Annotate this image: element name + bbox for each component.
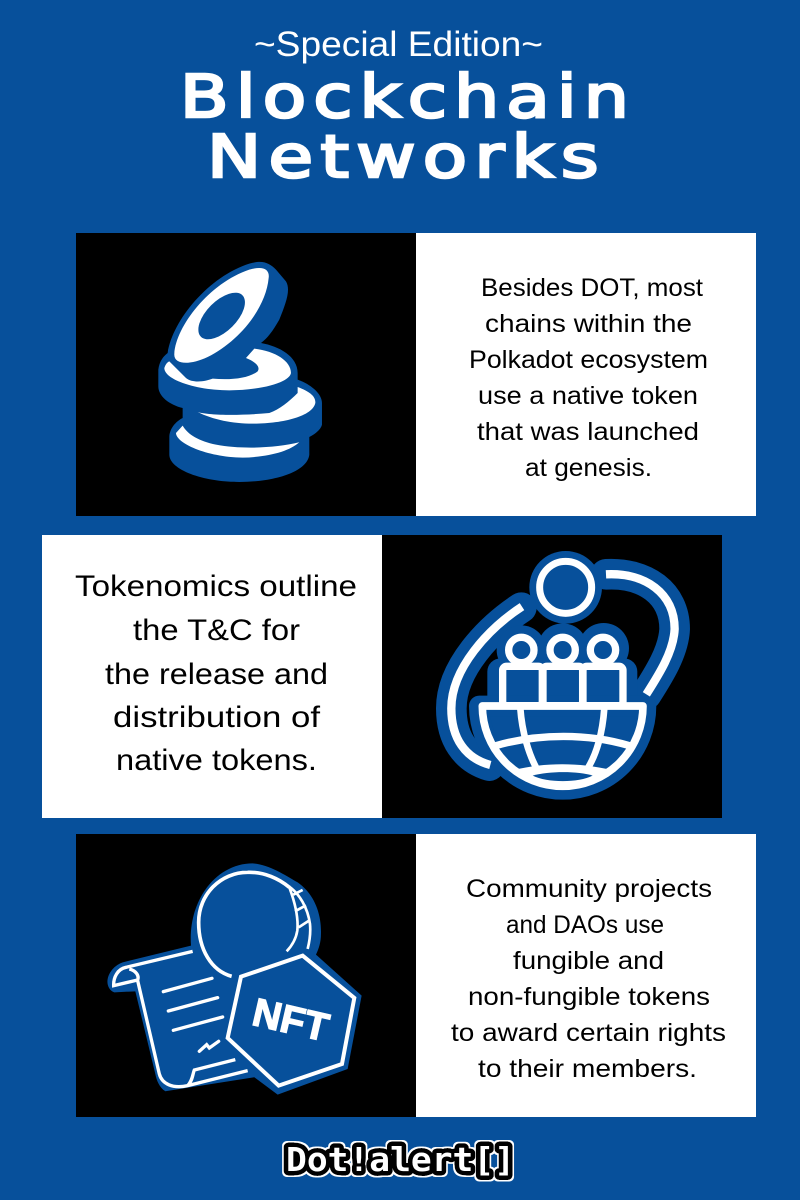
title line 1: Blockchain xyxy=(180,62,636,131)
text panel background xyxy=(416,233,756,516)
text panel background xyxy=(416,834,756,1117)
text: tokenomics description: native tokens. xyxy=(116,744,317,777)
text: community description: non-fungible tokens xyxy=(468,983,710,1011)
title block xyxy=(180,25,636,191)
text: community description: fungible and xyxy=(513,947,664,975)
text: native token description: chains within the xyxy=(485,310,692,338)
text: tokenomics description: Tokenomics outline xyxy=(75,570,357,603)
text: tokenomics description: distribution of xyxy=(113,701,321,734)
subtitle: ~Special Edition~ xyxy=(254,25,543,64)
panel: community projects xyxy=(76,834,756,1117)
icon panel background xyxy=(76,233,416,516)
text: community description xyxy=(451,875,726,1083)
text: tokenomics description: the release and xyxy=(105,658,328,691)
title line 2: Networks xyxy=(207,122,606,191)
text: community description: to award certain rights xyxy=(451,1019,726,1047)
text: native token description: use a native token xyxy=(478,382,698,410)
text: tokenomics description xyxy=(75,570,357,777)
text: tokenomics description: the T&C for xyxy=(133,614,300,647)
text panel background xyxy=(42,535,382,818)
text: native token description: Besides DOT, most xyxy=(481,274,703,302)
panel: native tokens xyxy=(76,233,756,516)
icon: scroll, coin and NFT hexagon xyxy=(107,863,362,1095)
text: native token description: Polkadot ecosystem xyxy=(469,346,708,374)
icon label: NFT: NFT xyxy=(248,990,333,1050)
text: native token description: at genesis. xyxy=(525,454,652,482)
icon: coin stack xyxy=(158,262,322,482)
logo: Dot!alert[]: Dot!alert[] xyxy=(286,1140,515,1179)
icon: community globe xyxy=(451,551,675,789)
text: native token description: that was launched xyxy=(477,418,699,446)
panel: tokenomics xyxy=(42,535,722,818)
icon panel background xyxy=(76,834,416,1117)
text: community description: Community projects xyxy=(466,875,712,903)
text: native token description xyxy=(469,274,708,482)
text: community description: and DAOs use xyxy=(506,911,664,939)
text: community description: to their members. xyxy=(478,1055,697,1083)
icon panel background xyxy=(382,535,722,818)
